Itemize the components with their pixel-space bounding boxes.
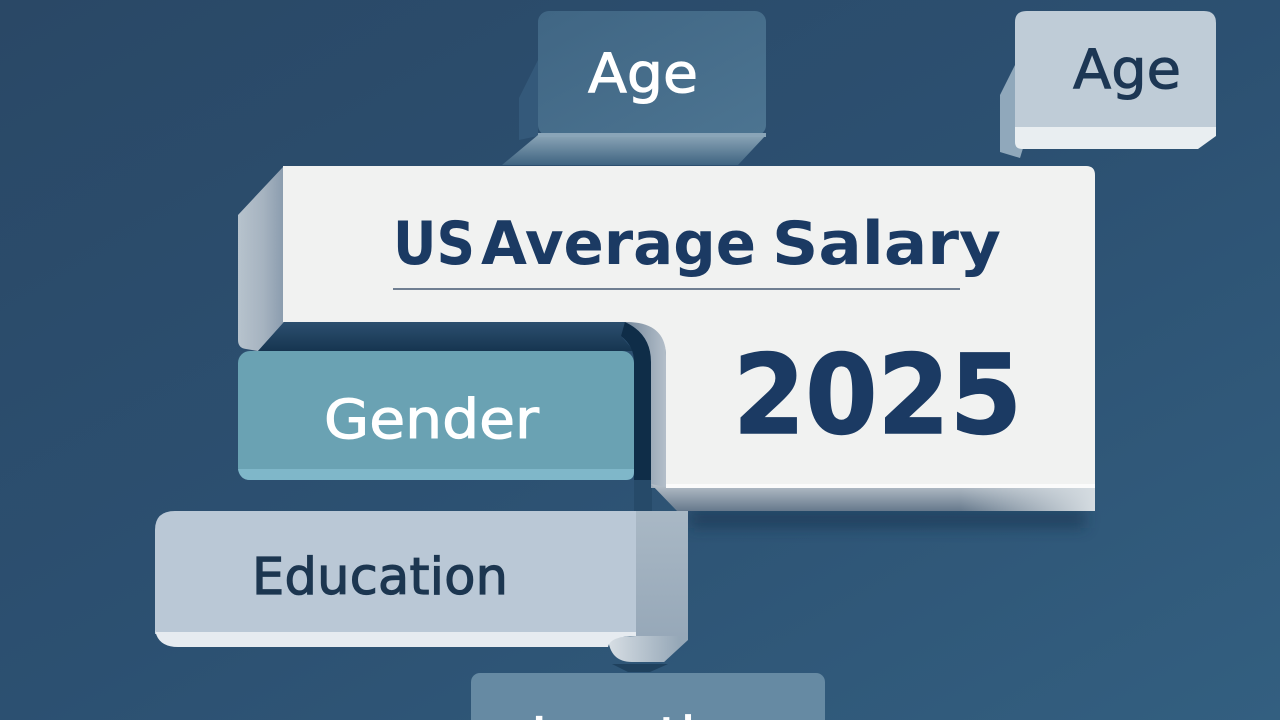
year: 2025 (733, 331, 1022, 459)
title: Average (481, 209, 756, 279)
card: Age dark: Age (588, 42, 698, 105)
card: Gender (238, 351, 634, 480)
title: US (393, 209, 475, 279)
card: Gender: Gender (324, 388, 540, 451)
card: Age light: Age (1073, 38, 1181, 101)
main title card (238, 166, 1095, 528)
card: Age dark (502, 11, 766, 165)
card: Location (cropped by the page edge) (471, 673, 825, 720)
card: Age light (1000, 11, 1216, 158)
title (393, 209, 1001, 279)
card: Education (155, 511, 688, 672)
title: Salary (772, 209, 1001, 279)
card: Education: Education (252, 548, 508, 607)
